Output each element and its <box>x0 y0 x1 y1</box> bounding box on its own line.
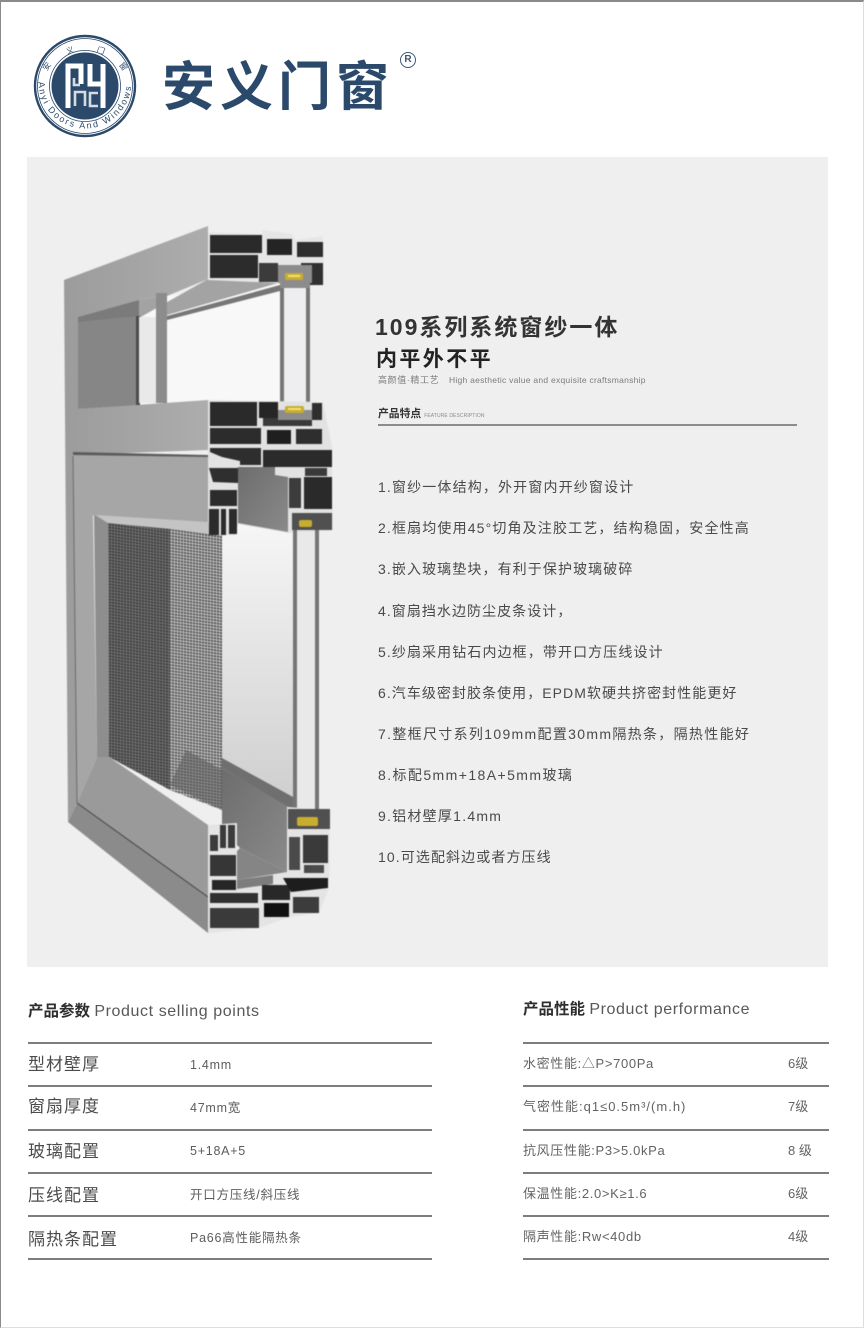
window cross-section illustration <box>64 226 333 934</box>
logo wordmark: 安义门窗 <box>162 58 394 117</box>
table: product performance: 6级 <box>788 1186 808 1201</box>
upper glazing <box>280 283 310 408</box>
panel: product <box>27 157 828 967</box>
registered mark: R <box>404 54 412 65</box>
table: product performance <box>523 1042 829 1260</box>
head section <box>208 230 324 287</box>
feature list: 1.窗纱一体结构，外开窗内开纱窗设计 <box>378 479 634 495</box>
table: product parameters: 1.4mm <box>190 1058 232 1072</box>
table: product performance: 气密性能:q1≤0.5m³/(m.h) <box>523 1099 686 1114</box>
table: product performance: 隔声性能:Rw<40db <box>523 1229 642 1244</box>
table: product performance: 水密性能:△P>700Pa <box>523 1056 654 1071</box>
logo emblem: 安 <box>40 60 53 72</box>
feature list <box>378 479 750 865</box>
feature heading: 产品特点 FEATURE DESCRIPTION <box>378 408 485 420</box>
tagline <box>378 375 646 385</box>
heading: product performance: 产品性能 Product performance <box>523 1001 750 1018</box>
frame faces <box>64 226 280 822</box>
table: product parameters: 压线配置 <box>28 1186 100 1205</box>
table: product parameters: 型材壁厚 <box>28 1055 100 1074</box>
title: 109系列系统窗纱一体 <box>375 314 619 340</box>
table: product performance: 6级 <box>788 1056 808 1071</box>
feature list: 2.框扇均使用45°切角及注胶工艺，结构稳固，安全性高 <box>378 520 750 536</box>
table: product parameters: 47mm宽 <box>190 1101 241 1115</box>
logo emblem: 门 <box>96 44 106 56</box>
feature list: 4.窗扇挡水边防尘皮条设计， <box>378 603 572 619</box>
table: product parameters: 开口方压线/斜压线 <box>190 1188 300 1202</box>
subtitle: 内平外不平 <box>376 348 493 371</box>
feature list: 10.可选配斜边或者方压线 <box>378 849 552 865</box>
table: product parameters: 5+18A+5 <box>190 1144 246 1158</box>
insect screen mesh <box>108 523 222 810</box>
bottom section <box>208 807 330 933</box>
sash faces <box>68 455 217 933</box>
table: product parameters: 隔热条配置 <box>28 1230 118 1249</box>
tagline: 高颜值·精工艺 <box>378 375 439 385</box>
table: product parameters: 玻璃配置 <box>28 1142 100 1161</box>
lower glazing <box>293 530 319 820</box>
text: High aesthetic value and exquisite craftsmanship <box>449 375 646 385</box>
middle transom section <box>208 400 333 535</box>
logo emblem: 窗 <box>117 60 130 72</box>
table: product performance: 4级 <box>788 1229 808 1244</box>
table: product parameters: 窗扇厚度 <box>28 1097 100 1116</box>
heading: product parameters: 产品参数 Product selling points <box>28 1003 260 1020</box>
feature list: 3.嵌入玻璃垫块，有利于保护玻璃破碎 <box>378 561 633 577</box>
feature list: 9.铝材壁厚1.4mm <box>378 808 502 824</box>
feature list: 5.纱扇采用钻石内边框，带开口方压线设计 <box>378 644 664 660</box>
feature list: 7.整框尺寸系列109mm配置30mm隔热条，隔热性能好 <box>378 726 750 742</box>
logo emblem: 义 <box>65 45 75 56</box>
feature list: 8.标配5mm+18A+5mm玻璃 <box>378 767 573 783</box>
lower glass pane <box>222 525 296 800</box>
logo emblem: Anyi Doors And Windows <box>38 82 131 128</box>
lower interior sill <box>208 758 293 889</box>
registered mark <box>400 52 416 68</box>
table: product performance: 保温性能:2.0>K≥1.6 <box>523 1186 647 1201</box>
feature list: 6.汽车级密封胶条使用，EPDM软硬共挤密封性能更好 <box>378 685 737 701</box>
table: product parameters: Pa66高性能隔热条 <box>190 1231 302 1245</box>
table: product performance: 7级 <box>788 1099 808 1114</box>
feature rule <box>378 424 797 426</box>
table: product performance: 8 级 <box>788 1143 812 1158</box>
logo emblem <box>34 34 136 138</box>
table: product performance: 抗风压性能:P3>5.0kPa <box>523 1143 665 1158</box>
table: product parameters <box>28 1042 432 1260</box>
upper glass pane <box>139 280 280 405</box>
